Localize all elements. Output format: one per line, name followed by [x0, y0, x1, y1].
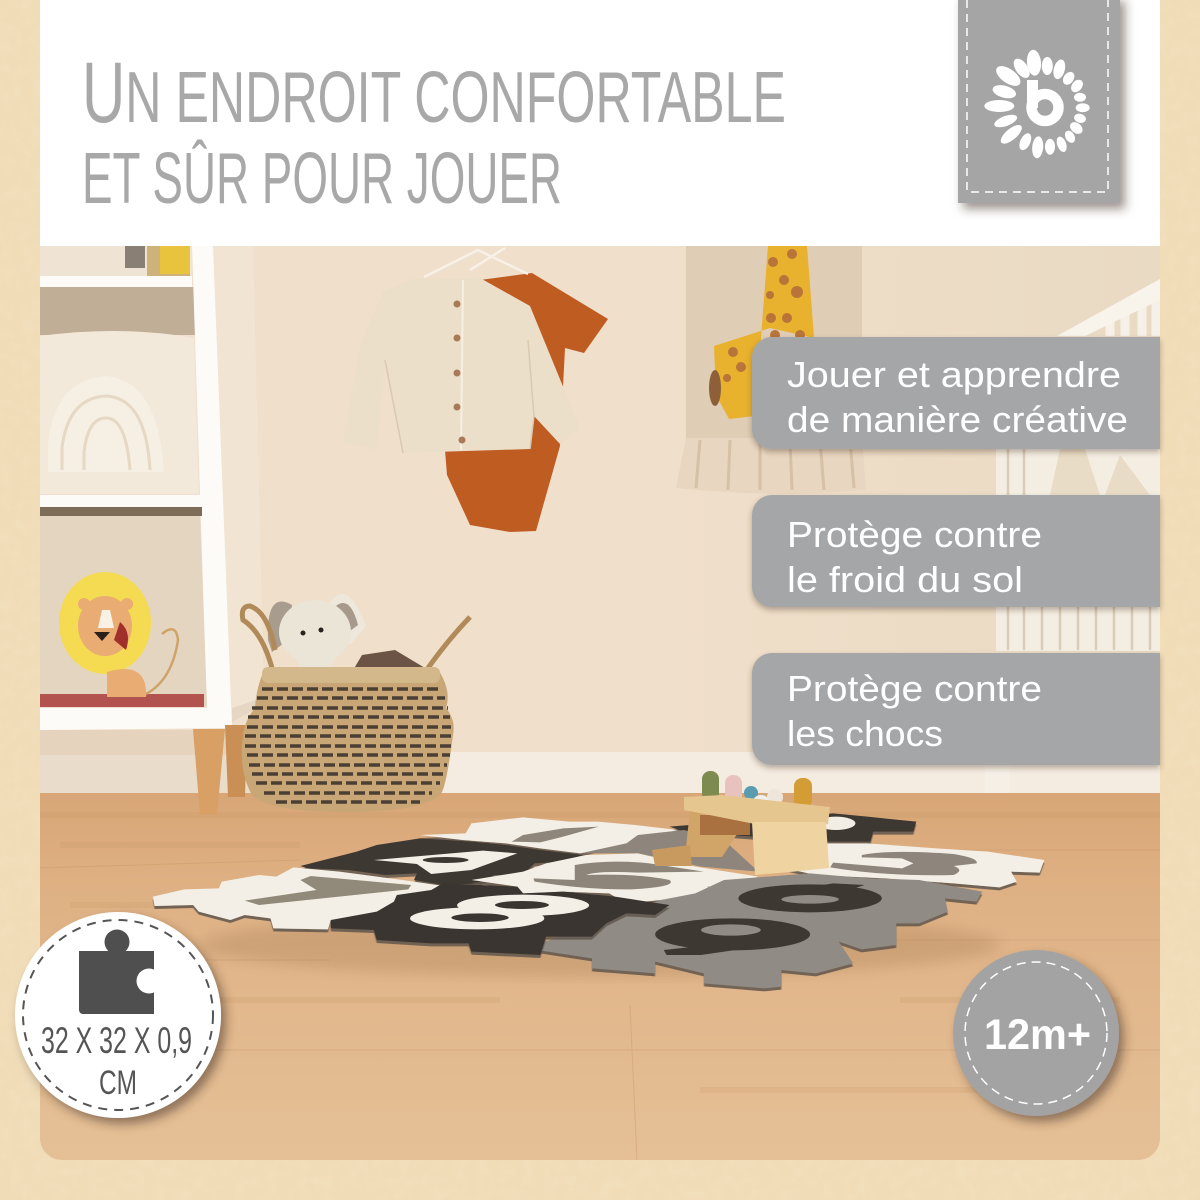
badge: age 12m+: 12m+ — [984, 1011, 1091, 1059]
tile: white 7 — [153, 867, 471, 929]
woven basket — [242, 606, 470, 812]
tile: grey 9 and 6 — [536, 873, 982, 988]
hanging clothes — [384, 247, 608, 532]
feature pill: cold floor: le froid du sol — [787, 559, 1023, 600]
tile: dark 4 — [300, 838, 583, 885]
tile: white 1 — [420, 817, 678, 853]
feature pill: shocks: Protège contre — [787, 668, 1042, 709]
badge: age 12m+ — [953, 950, 1119, 1116]
title — [82, 45, 786, 219]
toy elephant — [268, 594, 425, 674]
tile: dark 8 — [331, 883, 669, 955]
tile: white 5 — [471, 853, 758, 903]
feature pill: creative play — [752, 337, 1160, 449]
feature pill: shocks — [752, 653, 1160, 765]
header panel — [40, 0, 1160, 246]
badge: tile size — [15, 912, 221, 1118]
beige cardigan — [445, 280, 563, 452]
wooden floor — [40, 793, 1160, 1160]
brand tag with logo — [958, 0, 1120, 203]
photo scene: nursery — [40, 246, 1160, 1160]
wall hanging with giraffe — [676, 246, 866, 494]
size text: CM — [99, 1064, 137, 1102]
title: UN ENDROIT CONFORTABLE — [82, 45, 786, 141]
icon: flower b logo — [984, 49, 1090, 159]
wooden toy bench — [652, 771, 830, 875]
feature pill: cold floor: Protège contre — [787, 514, 1042, 555]
foam puzzle mat — [153, 813, 1044, 988]
feature pill: shocks: les chocs — [787, 713, 943, 754]
icon: lion — [59, 572, 178, 697]
storage box with lion — [40, 516, 207, 707]
white shelf unit — [40, 246, 264, 815]
baseboard — [40, 730, 1160, 795]
size text — [41, 1020, 192, 1102]
icon: puzzle piece — [79, 930, 162, 1014]
feature pill: creative play: Jouer et apprendre — [787, 354, 1121, 395]
wall — [40, 246, 1160, 806]
size text: 32 X 32 X 0,9 — [41, 1020, 192, 1061]
tile: dark 2 — [669, 813, 916, 842]
tile: white 3 — [781, 843, 1044, 887]
feature pill: cold floor — [752, 495, 1160, 607]
feature pill: creative play: de manière créative — [787, 399, 1128, 440]
title: ET SÛR POUR JOUER — [82, 139, 562, 219]
white crib — [996, 279, 1160, 651]
orange bodysuit — [445, 273, 608, 532]
tile: grey 2 — [580, 830, 758, 872]
fabric basket with rainbow — [40, 331, 199, 494]
